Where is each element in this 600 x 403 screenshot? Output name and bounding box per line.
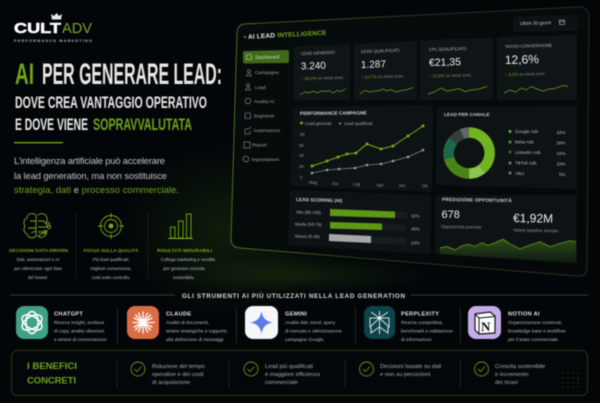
benefit: riduzione tempo: di acquisizione xyxy=(152,380,190,386)
tool: notion ai: Organizzazione contenuti, xyxy=(508,320,562,325)
tool: chatgpt: e sintesi di conversazioni. xyxy=(54,337,107,342)
panel: predizione opportunità xyxy=(435,195,577,263)
chart legend xyxy=(300,121,373,126)
tool: perplexity: PERPLEXITY xyxy=(401,312,439,318)
logo xyxy=(14,13,92,43)
benefit: lead qualificati: Lead più qualificati xyxy=(265,364,313,370)
intro paragraph: L’intelligenza artificiale può accelerare xyxy=(14,155,165,166)
tool: gemini xyxy=(245,306,342,342)
tool: perplexity: di informazioni. xyxy=(401,337,433,342)
intro paragraph xyxy=(14,155,179,195)
benefits heading: CONCRETI xyxy=(27,376,76,386)
tool: claude: sintesi strategiche e supporto xyxy=(166,328,227,334)
chart legend: Lead qualificati xyxy=(344,121,373,126)
feature: decisioni data-driven: per ottimizzare ogni fase xyxy=(14,266,62,271)
KPI card: tasso conversione: 12,6% xyxy=(505,52,539,67)
benefit: riduzione tempo: operative e dei costi xyxy=(152,372,204,378)
benefit: riduzione tempo: Riduzione del tempo xyxy=(152,364,205,370)
KPI card: tasso conversione xyxy=(497,35,577,100)
feature: risultati misurabili xyxy=(157,214,216,280)
panel: lead scoring: 32% xyxy=(411,214,420,218)
date selector: Ultimi 30 giorni xyxy=(520,20,551,26)
dashboard heading: AI LEAD xyxy=(248,32,275,41)
feature: focus sulla qualità: migliore conversione, xyxy=(90,266,132,271)
benefit: crescita xyxy=(474,362,545,386)
KPI card: CPL qualificato: ↓ 12,8% vs mese prec. xyxy=(429,72,473,78)
panel: lead scoring: Basso (0-49) xyxy=(295,234,320,239)
tool: perplexity: Ricerca competitiva, xyxy=(401,320,443,325)
KPI card: lead qualificati xyxy=(354,41,417,100)
feature: risultati misurabili: RISULTATI MISURABILI xyxy=(157,248,212,253)
feature: focus sulla qualità: FOCUS SULLA QUALITÀ xyxy=(84,247,139,253)
logo: ADV xyxy=(62,20,92,37)
donut legend: TikTok Ads xyxy=(515,160,537,166)
donut legend: LinkedIn Ads xyxy=(515,150,542,155)
chart panel: performance campagne: 4K xyxy=(299,153,304,158)
tool: chatgpt: di copy, analisi obiezioni xyxy=(54,328,104,334)
donut chart xyxy=(449,132,490,174)
intro paragraph: la lead generation, ma non sostituisce xyxy=(14,170,167,181)
icon: gemini xyxy=(245,306,278,339)
title: DOVE CREA VANTAGGIO OPERATIVO xyxy=(15,94,207,112)
donut legend: Google Ads xyxy=(515,129,539,134)
sidebar: Lead xyxy=(255,85,266,91)
tool: notion ai: knowledge base e workflow xyxy=(508,328,566,334)
title: SOPRAVVALUTATA xyxy=(93,116,192,134)
KPI card: lead generati xyxy=(294,44,350,100)
tool: perplexity: benchmark e validazione xyxy=(401,328,453,334)
chart panel: performance campagne: 2K xyxy=(299,164,304,169)
KPI card: lead generati: 3.240 xyxy=(301,61,327,72)
chart panel: performance campagne: Set xyxy=(399,183,406,188)
feature: decisioni data-driven: DECISIONI DATA-DRIVEN xyxy=(9,248,69,253)
date selector xyxy=(514,16,577,31)
tool: gemini: di mercato e ottimizzazione xyxy=(285,328,342,334)
benefits heading xyxy=(27,361,77,386)
logo: PERFORMANCE MARKETING xyxy=(14,38,92,43)
benefit: lead qualificati: e maggiore efficienza xyxy=(265,372,321,378)
donut legend xyxy=(508,129,566,177)
title: AI xyxy=(15,58,34,91)
panel: predizione opportunità: 678 xyxy=(442,209,460,221)
chart panel: performance campagne: Ott xyxy=(422,184,428,188)
tool: gemini: campagne Google. xyxy=(285,337,325,342)
KPI card: lead generati: LEAD GENERATI xyxy=(301,50,335,56)
chart panel: performance campagne: PERFORMANCE CAMPAGNE xyxy=(300,110,367,117)
bar: medio xyxy=(330,222,406,231)
chart panel: performance campagne xyxy=(290,105,433,192)
benefit: riduzione tempo xyxy=(131,362,205,386)
KPI card: lead generati: ↑ 18,4% vs mese prec. xyxy=(301,75,344,81)
chart panel: performance campagne: Ago xyxy=(376,182,384,188)
feature: risultati misurabili: Collega marketing e vendite xyxy=(161,257,216,262)
feature: focus sulla qualità: costi sotto controllo. xyxy=(92,275,130,280)
donut legend: 15% xyxy=(556,151,566,156)
benefit: crescita: dei ricavi xyxy=(495,380,518,386)
chart panel: performance campagne: Giu xyxy=(332,181,339,186)
feature: decisioni data-driven: Dati, automazioni e AI xyxy=(17,257,59,262)
dashboard heading xyxy=(244,30,327,41)
feature: decisioni data-driven: del funnel. xyxy=(28,275,48,280)
panel: predizione opportunità: Valore pipeline stimato xyxy=(513,228,559,233)
icon: notion: N xyxy=(481,319,491,334)
tool: gemini: GEMINI xyxy=(285,312,307,318)
tool: gemini: Analisi dati, trend, query xyxy=(285,320,336,325)
chart panel: performance campagne: 6K xyxy=(299,143,304,148)
KPI card: tasso conversione: TASSO CONVERSIONE xyxy=(505,43,552,49)
tool: notion ai: NOTION AI xyxy=(508,312,540,318)
sidebar: Report xyxy=(252,142,267,148)
panel: lead scoring: 45% xyxy=(411,226,420,232)
tool: claude: alla definizione di messaggi. xyxy=(166,337,225,342)
icon: brain xyxy=(24,214,51,238)
panel: predizione opportunità: PREDIZIONE OPPORTUNITÀ xyxy=(442,196,512,204)
chart panel: performance campagne: 8K xyxy=(300,132,305,137)
area chart xyxy=(440,239,576,263)
benefit: decisioni: Decisioni basate su dati xyxy=(380,364,441,370)
tool: claude: Analisi di documenti, xyxy=(166,320,209,325)
benefits heading: I BENEFICI xyxy=(27,361,77,372)
feature: risultati misurabili: per generare crescita xyxy=(163,266,205,271)
chart panel: performance campagne: Lug xyxy=(353,182,361,186)
line: lead qualificati xyxy=(311,149,424,174)
panel: lead scoring xyxy=(288,190,431,254)
panel: predizione opportunità: €1,92M xyxy=(513,211,553,226)
feature: risultati misurabili: sostenibile. xyxy=(173,275,195,280)
benefit: decisioni: e non su percezioni xyxy=(380,372,430,378)
sidebar: Impostazioni xyxy=(252,157,279,163)
panel: lead scoring: LEAD SCORING (AI) xyxy=(296,197,343,204)
KPI card: lead qualificati: ↑ 23,7% vs mese prec. xyxy=(361,73,405,79)
donut legend: 28% xyxy=(556,140,566,146)
feature: focus sulla qualità: Più lead qualificati, xyxy=(93,257,129,262)
tool: perplexity xyxy=(364,306,453,342)
donut legend: 42% xyxy=(556,130,566,135)
benefit: decisioni xyxy=(360,362,441,378)
tools section heading: GLI STRUMENTI AI PIÙ UTILIZZATI NELLA LEAD GENERATION xyxy=(182,291,405,300)
icon: claude xyxy=(127,306,159,339)
icon: perplexity xyxy=(364,306,395,339)
benefit: crescita: Crescita sostenibile xyxy=(495,364,545,370)
chart legend: Lead generati xyxy=(305,121,331,126)
title: E DOVE VIENE xyxy=(15,116,88,134)
KPI card: tasso conversione: ↑ 3,2% vs mese prec. xyxy=(505,71,546,77)
icon: chatgpt xyxy=(16,306,48,339)
KPI card: CPL qualificato: €21,35 xyxy=(429,56,461,69)
intro paragraph: strategia, dati e processo commerciale. xyxy=(14,184,179,195)
dashboard heading: INTELLIGENCE xyxy=(277,30,327,39)
benefit: lead qualificati: commerciale xyxy=(265,380,298,386)
feature: decisioni data-driven xyxy=(9,214,69,280)
panel: predizione opportunità: Opportunità previste xyxy=(441,224,482,230)
benefit: lead qualificati xyxy=(244,362,321,386)
donut legend: Meta Ads xyxy=(515,140,535,144)
sidebar xyxy=(243,50,289,163)
logo: CULT xyxy=(14,20,61,37)
feature: focus sulla qualità xyxy=(84,213,139,280)
sidebar: Analisi AI xyxy=(254,99,274,105)
sidebar: Automazioni xyxy=(253,128,280,134)
donut legend: 10% xyxy=(556,162,566,166)
bar: alto xyxy=(330,209,407,218)
tool: chatgpt: CHATGPT xyxy=(54,312,83,318)
sidebar: Segmenti xyxy=(254,114,274,120)
donut legend: 5% xyxy=(559,172,566,177)
title xyxy=(15,58,222,134)
sidebar: Campagne xyxy=(255,70,279,76)
panel: lead scoring: Alto (80-100) xyxy=(296,210,321,215)
icon: target xyxy=(98,213,124,239)
tool: notion ai: per il team commerciale. xyxy=(508,337,559,342)
panel: lead per canale: LEAD PER CANALE xyxy=(444,112,490,118)
KPI card: CPL qualificato: CPL QUALIFICATO xyxy=(429,46,467,52)
bar: basso xyxy=(329,234,406,245)
chart panel: performance campagne: 0 xyxy=(300,175,303,180)
panel: lead per canale xyxy=(436,106,577,189)
title: PER GENERARE LEAD: xyxy=(42,58,222,91)
panel: lead scoring: 23% xyxy=(411,240,420,246)
icon: bars xyxy=(168,214,193,238)
tool: notion ai xyxy=(468,306,566,342)
benefit: crescita: e incremento xyxy=(495,372,529,378)
donut legend: Altro xyxy=(515,171,525,176)
tool: chatgpt xyxy=(16,306,107,342)
line: lead generati xyxy=(310,124,424,168)
tool: claude: CLAUDE xyxy=(166,312,192,318)
chart panel: performance campagne: Mag xyxy=(309,180,318,185)
tool: claude xyxy=(127,306,227,342)
nav: dashboard active: Dashboard xyxy=(255,54,280,61)
dashboard frame xyxy=(231,7,589,276)
panel: benefits xyxy=(12,350,588,396)
KPI card: lead qualificati: 1.287 xyxy=(361,59,387,71)
KPI card: lead qualificati: LEAD QUALIFICATI xyxy=(361,48,400,54)
tool: chatgpt: Ricerca insight, scrittura xyxy=(54,320,104,325)
KPI card: CPL qualificato xyxy=(420,38,493,100)
panel: lead scoring: Medio (50-79) xyxy=(295,222,322,227)
